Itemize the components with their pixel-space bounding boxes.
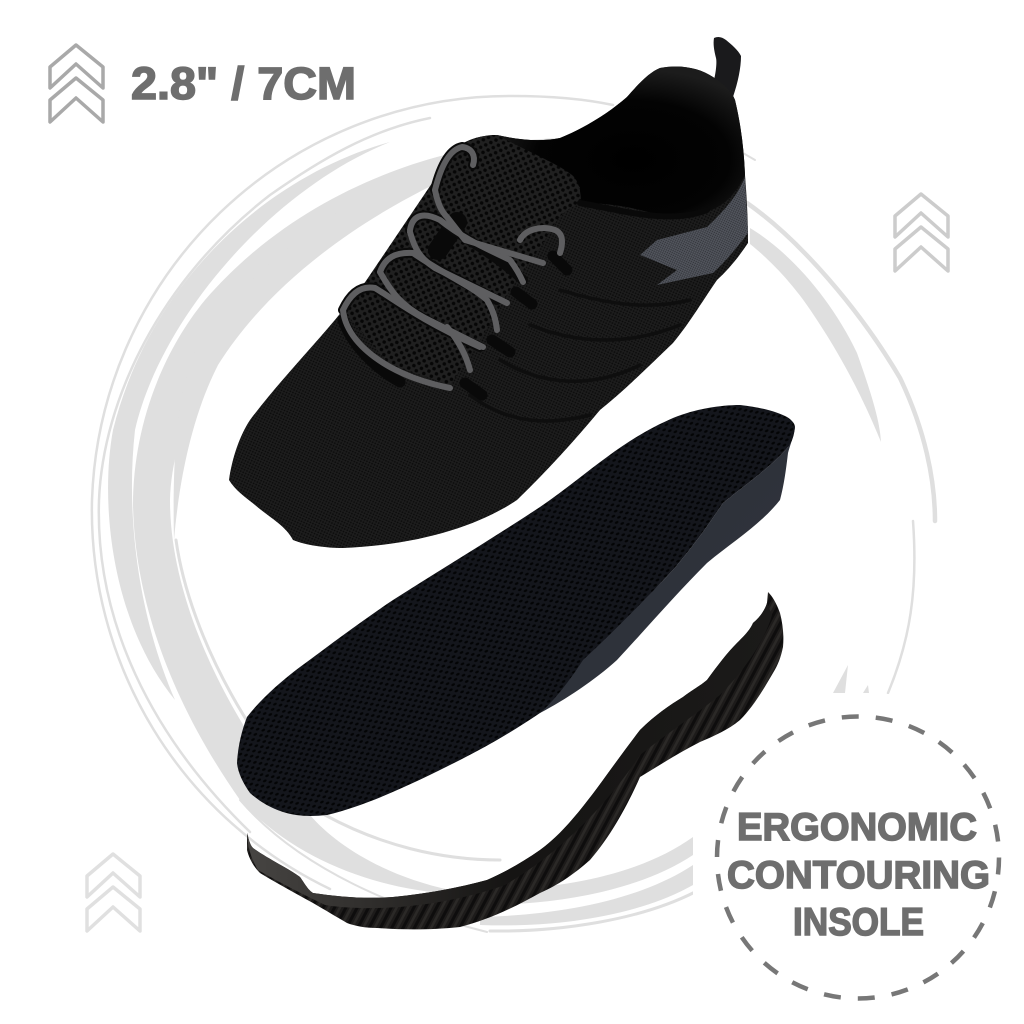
sole smooth upper surface [247, 603, 772, 908]
contoured sole [247, 592, 783, 929]
second hairline [99, 118, 430, 832]
circular brush swirl [92, 96, 935, 932]
badge text: CONTOURING [727, 854, 990, 897]
lace under-shadow [343, 147, 523, 347]
right outer band [747, 203, 935, 521]
lower inner line [176, 540, 500, 860]
heel pull tab [714, 37, 741, 97]
right thick crescent [750, 228, 881, 442]
shoe upper [229, 66, 748, 548]
right hairline [888, 521, 914, 693]
badge: dashed circle [717, 716, 999, 998]
icon: height chevrons top left [50, 45, 103, 122]
thick left crescent [108, 142, 390, 700]
bottom right bands [480, 837, 693, 925]
badge text: INSOLE [793, 901, 924, 944]
bottom hairline [490, 892, 695, 931]
badge text [727, 806, 990, 944]
white backing square behind badge [693, 694, 1024, 1024]
lower outer hairline [240, 800, 487, 932]
sole body with ridges [247, 592, 783, 929]
small brush flecks [833, 665, 869, 693]
insole foam wedge [530, 427, 795, 713]
icon: chevrons right [895, 194, 948, 271]
icon: chevrons bottom left [87, 854, 140, 931]
shoe [229, 37, 748, 548]
grey heel knit panel [640, 177, 748, 285]
shoe laces [343, 147, 562, 388]
insole [237, 405, 795, 816]
shoe collar lining [497, 66, 745, 216]
badge text: ERGONOMIC [737, 806, 977, 849]
right small tick [743, 153, 755, 160]
height label: 2.8" / 7CM [131, 58, 356, 109]
inner brush band [174, 152, 470, 540]
main brush band [133, 138, 560, 895]
insole mesh top [237, 405, 795, 816]
shoe stitched stripes [470, 203, 707, 421]
lace eyelet tabs [343, 222, 567, 395]
shoe tongue [345, 135, 581, 385]
outer hairlines [92, 96, 613, 889]
